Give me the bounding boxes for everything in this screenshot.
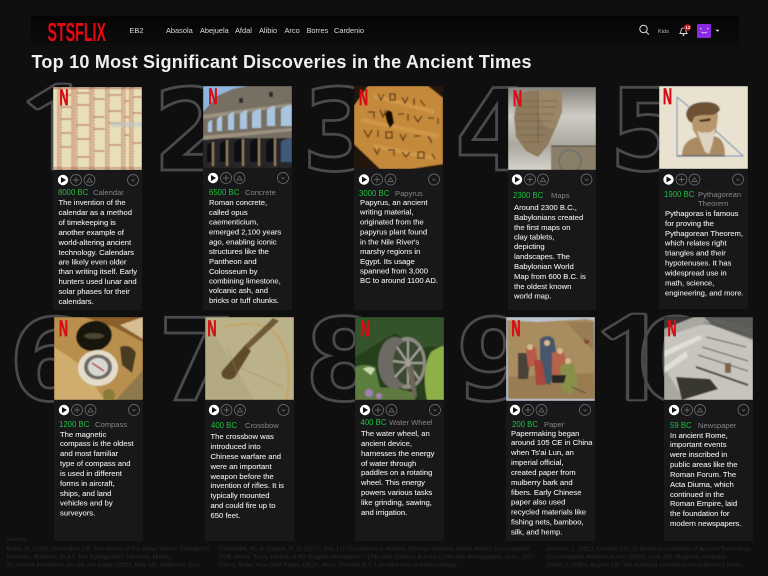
description: calendars. [58, 297, 94, 306]
card 10: Newspaper [581, 295, 753, 541]
nav links [130, 26, 364, 35]
rank number 10: 0 [637, 295, 716, 427]
description: Map from 600 B.C. is [514, 272, 586, 281]
description: type of compass and [60, 459, 131, 468]
sources: Goff, Moira. "Early History of the English Newspaper." 17th-18th Century Burney Collection Newspapers. Gale. 2007 [219, 554, 535, 560]
nav links: Alibio [259, 26, 277, 35]
panel [53, 87, 142, 310]
date and name [664, 190, 741, 208]
description: paddles on a rotating [361, 468, 432, 477]
sources: Encyclopædia Britannica, Inc. (2023, June 29). Magnetic compass. [546, 554, 729, 560]
description: clay tablets, [514, 232, 554, 242]
date and name: Paper [544, 420, 565, 429]
description: invention of rifles. It is [210, 481, 284, 490]
description: originated from the [360, 218, 424, 226]
icon: netflix N: N [513, 86, 522, 111]
description: important events [670, 440, 727, 449]
icon: netflix N: N [668, 316, 676, 341]
description [209, 198, 281, 305]
date and name: 1200 BC [59, 420, 90, 429]
rank number 1: 1 [6, 74, 110, 187]
navigation bar [31, 16, 739, 47]
controls [209, 404, 289, 416]
description: Babylonian World [514, 262, 574, 271]
description: around 105 CE in China [511, 438, 593, 447]
controls [208, 172, 288, 184]
description: ships, and land [60, 489, 111, 498]
image: newspapers [664, 317, 753, 400]
description: harnesses the energy [361, 449, 435, 458]
description: the first maps on [514, 223, 570, 232]
sources: Cartwright, M., & Sawyer, R. D. (2017, July 17). Crossbows in Ancient Chinese Warfare. World History Encyclopedia [219, 546, 531, 552]
date and name: Pythagorean [698, 190, 741, 199]
nav links: Cardenio [334, 26, 364, 35]
icon: netflix N: N [360, 316, 370, 341]
panel [508, 87, 596, 310]
description: Roman Forum. The [670, 470, 736, 479]
card 3: Papyrus [302, 65, 443, 310]
date and name: 400 BC [360, 418, 387, 427]
panel [203, 86, 292, 310]
description: world-altering ancient [58, 238, 132, 247]
icon: caret [716, 30, 720, 32]
icon: netflix N: N [359, 85, 368, 110]
description: is used in different [60, 469, 123, 478]
description: and irrigation. [361, 508, 407, 517]
description [360, 429, 435, 517]
sources: Johnson, L. (2021, October 15). 15 Amazing Examples of Ancient Technology. [546, 546, 753, 552]
date and name: 200 BC [512, 420, 538, 429]
nav links: Abasola [166, 26, 194, 35]
image: compass [54, 317, 143, 400]
description: marshy regions in [360, 247, 420, 256]
panel [506, 317, 595, 541]
icon: netflix N: N [512, 316, 520, 341]
description [210, 432, 284, 520]
rank number 10: 1 [581, 304, 685, 417]
icon: netflix N: N [663, 84, 672, 109]
nav links: Arco [284, 26, 300, 35]
description: are likely even older [58, 258, 127, 266]
description: combining limestone, [209, 276, 281, 286]
description: engineering, and more. [665, 288, 744, 298]
description: created paper from [511, 468, 576, 477]
panel [354, 86, 443, 310]
description: solar phases for their [58, 287, 130, 296]
kids link: Kids [658, 29, 669, 35]
rank number 3: 3 [302, 65, 381, 197]
rank number 8: 8 [305, 295, 384, 427]
description: of timekeeping is [58, 218, 116, 227]
description: The water wheel, an [361, 429, 430, 438]
description: Pantheon and [209, 257, 257, 266]
icon: netflix N: N [208, 84, 218, 109]
description [510, 429, 593, 536]
description: mulberry bark and [511, 478, 573, 487]
description: structures like the [209, 247, 269, 256]
description: papyrus plant found [360, 228, 427, 236]
panel [54, 317, 143, 541]
description: paper also used [511, 498, 565, 506]
controls [360, 404, 440, 416]
description: The crossbow was [210, 432, 274, 441]
sources: Bellis, M. (2019, November 24). The history of the Water Wheel. ThoughtCo. [6, 546, 212, 552]
panel [664, 317, 753, 541]
description: writing material, [359, 208, 414, 216]
image: clay tablet map [508, 87, 596, 170]
card 9: Paper [456, 295, 595, 541]
description: Colosseum by [209, 267, 258, 276]
description: forms in aircraft, [60, 479, 115, 488]
description: Egypt. Its usage [360, 257, 415, 266]
description: public areas like the [670, 460, 738, 469]
description: Roman concrete, [209, 198, 267, 207]
date and name: 3000 BC [359, 189, 390, 198]
description: Pythagorean Theorem, [665, 229, 743, 238]
controls [510, 404, 590, 416]
image: ancient chinese paper painting [506, 317, 595, 401]
rank number 2: 2 [153, 65, 232, 197]
sources: Sources: [6, 537, 28, 543]
controls [59, 404, 139, 416]
card 8: Water Wheel [305, 295, 444, 541]
icon: notification bell [680, 24, 691, 36]
sources: Dolerson, Breanna. (n.d.). The Pythagorean Theorem. History [6, 554, 172, 560]
description: continued in the [670, 490, 724, 499]
date and name [513, 191, 570, 200]
date and name: Calendar [93, 188, 124, 197]
nav links: Abejuela [200, 26, 230, 35]
date and name [360, 418, 433, 427]
date and name [209, 188, 276, 197]
description: of water through [361, 459, 416, 468]
date and name [211, 421, 279, 430]
date and name: Newspaper [698, 421, 737, 430]
description: BC to around 1100 AD. [360, 276, 438, 285]
date and name: 400 BC [211, 421, 237, 430]
card 6: Compass [9, 295, 143, 541]
card 1: Calendar [6, 74, 142, 310]
date and name [359, 189, 423, 198]
rank number 7: 7 [158, 295, 237, 427]
description: typically mounted [210, 491, 270, 500]
description: technology. Calendars [58, 248, 134, 257]
sources: China: Make Your Own Paper. (2020, May). Timothy S.Y. Lam Museum of Anthropology. [219, 562, 458, 568]
description: Papermaking began [511, 429, 579, 438]
icon: search [640, 25, 649, 35]
date and name: 1900 BC [664, 190, 695, 199]
panel [205, 317, 294, 541]
icon: profile avatar [697, 24, 711, 38]
date and name: Theorem [698, 199, 728, 208]
icon: notification bell: 12 [685, 25, 691, 30]
icon: netflix N: N [59, 316, 68, 341]
nav links: Afdal [235, 26, 252, 35]
rank number 9: 9 [456, 295, 535, 427]
image: crossbow [205, 317, 294, 400]
date and name: Papyrus [395, 189, 423, 198]
description: Babylonians created [514, 213, 583, 222]
date and name: Water Wheel [389, 418, 433, 427]
description: when Ts'ai Lun, an [510, 448, 574, 457]
description: powers various tasks [361, 488, 433, 497]
date and name: 2300 BC [513, 191, 544, 200]
description: Pythagoras is famous [665, 209, 739, 218]
image: papyrus [354, 86, 443, 169]
date and name: 8000 BC [58, 188, 89, 197]
description: modern newspapers. [670, 519, 741, 528]
description: the oldest known [514, 282, 571, 291]
date and name: Concrete [245, 188, 276, 197]
description: surveyors. [60, 508, 95, 518]
description: bricks or tuff chunks. [209, 296, 279, 305]
description: emerged 2,100 years [209, 228, 281, 236]
description: imperial official, [511, 458, 564, 467]
description: wheel. This energy [360, 478, 425, 487]
controls [359, 174, 440, 185]
sources: 20 ancient inventions we still use today. (2023, May 16). Baltimore Sun. [6, 562, 201, 568]
logo: STSFLIX: STSFLIX [48, 17, 106, 47]
description: were an important [210, 462, 273, 471]
description: like grinding, sawing, [361, 498, 432, 507]
description: math, science, [665, 278, 714, 288]
description: Around 2300 B.C., [514, 203, 577, 212]
description: vehicles and by [60, 498, 113, 508]
description: the foundation for [670, 509, 730, 518]
nav links: Borres [306, 26, 329, 35]
controls [669, 404, 749, 416]
image: calendar manuscript [53, 87, 142, 170]
description: for proving the [665, 219, 714, 228]
description [359, 198, 438, 285]
date and name: Maps [551, 191, 570, 200]
description: The invention of the [58, 198, 126, 207]
description: Roman Empire, laid [670, 499, 737, 508]
description: Chinese warfare and [210, 452, 281, 461]
date and name [58, 188, 124, 197]
card 2: Concrete [153, 65, 292, 310]
description: were inscribed in [669, 450, 727, 459]
description [513, 203, 586, 300]
sources: Gillan, J. (2023, August 23). Ten Amazing Inventions From Ancient Times. [546, 562, 745, 568]
date and name: 59 BC [670, 421, 692, 430]
rank number 10 [581, 295, 716, 427]
description: volcanic ash, and [209, 286, 268, 295]
description: recycled materials like [511, 508, 586, 516]
controls [58, 174, 138, 186]
title: Top 10 Most Significant Discoveries in the Ancient Times [32, 52, 532, 72]
sources [6, 537, 753, 568]
icon: netflix N: N [208, 316, 216, 341]
description: in the Nile River's [360, 238, 419, 246]
description: ancient device, [361, 439, 412, 448]
image: pythagoras bust [659, 86, 748, 169]
description [58, 198, 137, 306]
description: hunters used lunar and [58, 277, 137, 286]
description: compass is the oldest [60, 439, 134, 448]
description: another example of [58, 228, 125, 237]
description: called opus [209, 208, 248, 217]
description [664, 209, 744, 298]
icon: netflix N: N [60, 85, 68, 110]
description: The magnetic [60, 430, 106, 439]
panel [659, 86, 748, 309]
description: world map. [513, 292, 551, 300]
description: triangles and their [665, 248, 726, 258]
rank number 4: 4 [455, 65, 534, 197]
description [60, 430, 134, 518]
image: water wheel [355, 317, 444, 400]
description: fishing nets, bamboo, [511, 518, 584, 526]
image: colosseum [203, 86, 292, 168]
date and name [512, 420, 565, 429]
date and name [670, 421, 737, 430]
description: 650 feet. [210, 511, 240, 520]
nav links: EB2 [130, 26, 143, 35]
card 4: Maps [455, 65, 596, 310]
controls [512, 174, 592, 185]
description: and most familiar [60, 449, 119, 458]
description: Papyrus, an ancient [360, 198, 428, 207]
description: widespread use in [664, 268, 727, 278]
date and name: Crossbow [245, 421, 279, 430]
panel [355, 317, 444, 541]
description: weapon before the [210, 472, 274, 481]
description: landscapes. The [514, 252, 570, 261]
rank number 5: 5 [609, 65, 688, 197]
controls [663, 174, 744, 185]
description: ago, enabling iconic [209, 238, 277, 246]
description: depicting [514, 242, 545, 251]
description: introduced into [210, 442, 261, 451]
rank number 6: 6 [9, 295, 88, 427]
description [669, 431, 741, 528]
description: hypotenuses. It has [665, 258, 731, 268]
card 7: Crossbow [158, 295, 294, 541]
description: Acta Diurna, which [670, 480, 734, 489]
description: than writing itself. Early [58, 267, 137, 276]
date and name [59, 420, 127, 429]
date and name: 6500 BC [209, 188, 240, 197]
description: calendar as a method [58, 208, 132, 217]
card 5: Pythagorean Theorem [609, 65, 748, 309]
description: silk, and hemp. [511, 528, 562, 536]
description: In ancient Rome, [670, 431, 728, 440]
description: caementicium, [209, 218, 258, 226]
description: and could fire up to [210, 501, 276, 510]
date and name: Compass [95, 420, 127, 429]
description: fibers. Early Chinese [511, 488, 582, 497]
description: spanned from 3,000 [360, 266, 428, 276]
description: which relates right [664, 238, 727, 248]
